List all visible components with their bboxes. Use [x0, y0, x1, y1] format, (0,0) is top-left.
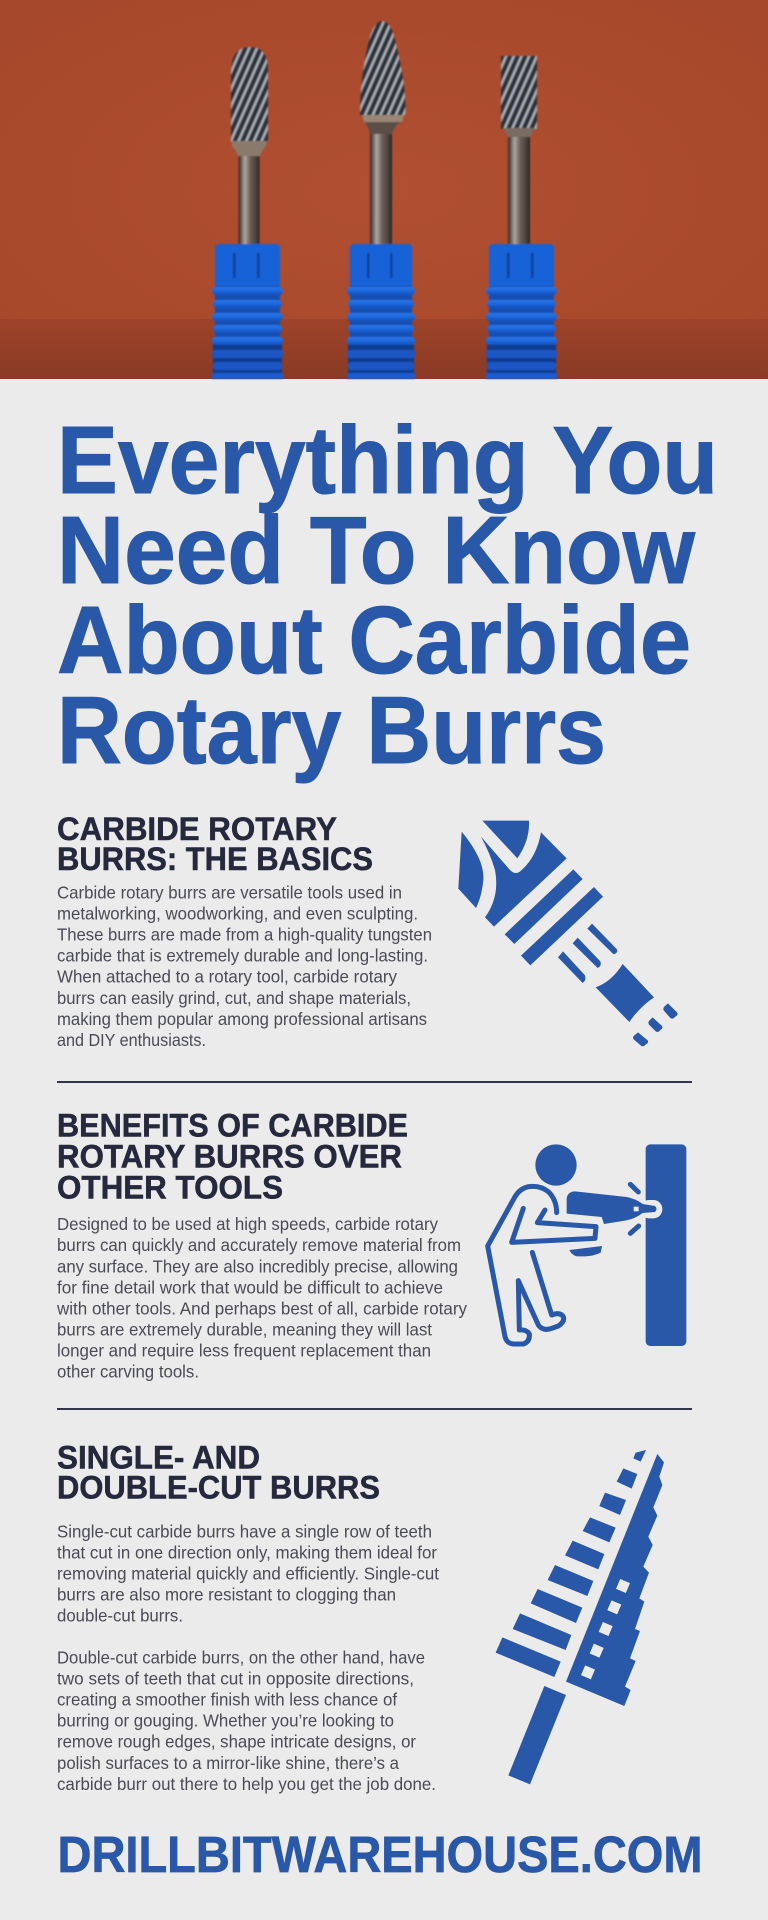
- body text: benefits: with other tools. And perhaps best of all, carbide rotary: [56, 1299, 467, 1319]
- body text: single-cut: [57, 1521, 439, 1626]
- body text: benefits: other carving tools.: [57, 1362, 199, 1382]
- body text: basics: burrs can easily grind, cut, and shape materials,: [57, 988, 411, 1008]
- body text: double-cut: creating a smoother finish with less chance of: [57, 1690, 397, 1710]
- title: Everything You: [57, 407, 718, 514]
- body text: single-cut: that cut in one direction only, making them ideal for: [57, 1542, 437, 1562]
- body text: basics: When attached to a rotary tool, carbide rotary: [57, 967, 397, 987]
- panel: benefits: [56, 1108, 686, 1382]
- heading: basics: [57, 811, 373, 877]
- body text: double-cut: polish surfaces to a mirror-like shine, there’s a: [57, 1753, 399, 1773]
- heading: single and double cut: [57, 1439, 380, 1505]
- body text: basics: and DIY enthusiasts.: [57, 1030, 206, 1050]
- body text: single-cut: double-cut burrs.: [57, 1606, 183, 1626]
- hero photo: three carbide burrs on terracotta background: [0, 0, 768, 379]
- body text: benefits: [56, 1214, 467, 1382]
- heading: benefits: [57, 1108, 408, 1205]
- body text: double-cut: burring or gouging. Whether you’re looking to: [57, 1711, 394, 1731]
- body text: benefits: for fine detail work that would be difficult to achieve: [57, 1277, 443, 1297]
- body text: benefits: longer and require less frequent replacement than: [57, 1341, 431, 1361]
- heading: basics: CARBIDE ROTARY: [57, 811, 337, 847]
- icon: worker drilling into wall: [488, 1144, 686, 1346]
- heading: basics: BURRS: THE BASICS: [57, 841, 373, 877]
- title: Need To Know: [57, 497, 695, 604]
- burr: round-nose: [212, 47, 283, 379]
- panel: single- and double-cut burrs: [57, 1439, 664, 1794]
- body text: basics: metalworking, woodworking, and even sculpting.: [57, 904, 418, 924]
- body text: basics: These burrs are made from a high-quality tungsten: [57, 925, 432, 945]
- body text: double-cut: two sets of teeth that cut in opposite directions,: [57, 1669, 414, 1689]
- heading: benefits: BENEFITS OF CARBIDE: [57, 1108, 408, 1144]
- body text: benefits: Designed to be used at high speeds, carbide rotary: [57, 1214, 438, 1234]
- body text: double-cut: [57, 1647, 436, 1794]
- body text: double-cut: remove rough edges, shape intricate designs, or: [57, 1732, 416, 1752]
- panel: carbide rotary burrs basics: [57, 811, 678, 1050]
- body text: basics: making them popular among professional artisans: [57, 1009, 427, 1029]
- heading: benefits: ROTARY BURRS OVER: [57, 1138, 402, 1174]
- body text: basics: [57, 882, 432, 1050]
- body text: basics: Carbide rotary burrs are versatile tools used in: [57, 882, 402, 902]
- icon: step drill bit: [496, 1450, 664, 1784]
- body text: benefits: burrs are extremely durable, meaning they will last: [57, 1320, 432, 1340]
- burr: flame: [347, 21, 415, 379]
- body text: basics: carbide that is extremely durable and long-lasting.: [57, 946, 428, 966]
- burr: cylinder: [486, 56, 557, 379]
- title: Rotary Burrs: [57, 677, 606, 784]
- heading: single and double cut: DOUBLE-CUT BURRS: [57, 1469, 380, 1505]
- heading: benefits: OTHER TOOLS: [57, 1169, 283, 1205]
- title: About Carbide: [57, 587, 691, 694]
- icon: carbide burr bit: [458, 821, 678, 1046]
- heading: single and double cut: SINGLE- AND: [57, 1439, 260, 1475]
- footer website: DRILLBITWAREHOUSE.COM: [58, 1826, 702, 1883]
- title: [57, 407, 718, 784]
- body text: single-cut: Single-cut carbide burrs have a single row of teeth: [57, 1521, 432, 1541]
- body text: double-cut: Double-cut carbide burrs, on the other hand, have: [57, 1647, 425, 1667]
- body text: double-cut: carbide burr out there to help you get the job done.: [57, 1774, 436, 1794]
- body text: single-cut: burrs are also more resistant to clogging than: [57, 1585, 396, 1605]
- body text: benefits: any surface. They are also incredibly precise, allowing: [57, 1256, 458, 1276]
- body text: benefits: burrs can quickly and accurately remove material from: [57, 1235, 461, 1255]
- body text: single-cut: removing material quickly and efficiently. Single-cut: [57, 1564, 439, 1584]
